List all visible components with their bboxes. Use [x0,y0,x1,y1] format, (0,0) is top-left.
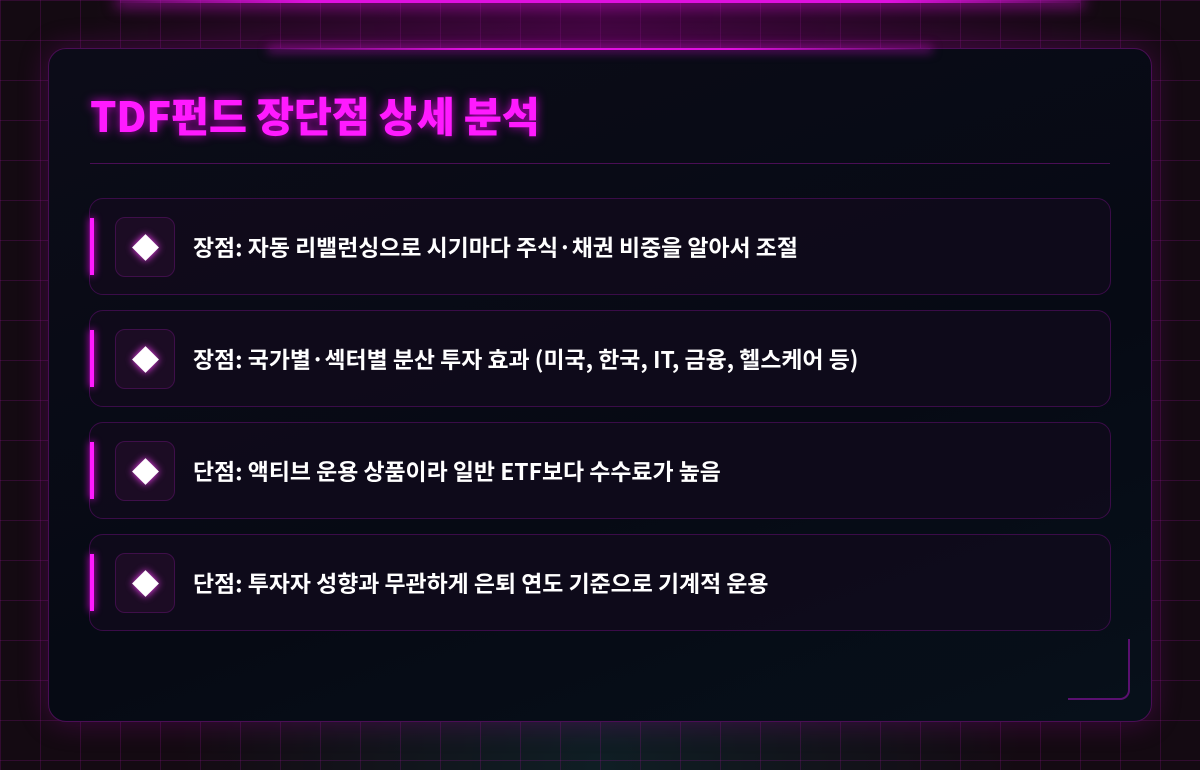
icon: diamond [115,217,175,277]
text: 장점: 자동 리밸런싱으로 시기마다 주식·채권 비중을 알아서 조절 [193,229,798,263]
text: 단점: 액티브 운용 상품이라 일반 ETF보다 수수료가 높음 [193,453,721,487]
text: 단점: 투자자 성향과 무관하게 은퇴 연도 기준으로 기계적 운용 [193,565,768,599]
text: 장점: 국가별·섹터별 분산 투자 효과 (미국, 한국, IT, 금융, 헬스케어 등) [193,341,858,375]
title: TDF펀드 장단점 상세 분석 [90,84,540,144]
icon: diamond [115,329,175,389]
icon: diamond [115,441,175,501]
item: disadvantage 1 [89,422,1111,519]
item: advantage 2 [89,310,1111,407]
item: advantage 1 [89,198,1111,295]
icon: diamond [115,553,175,613]
item: disadvantage 2 [89,534,1111,631]
